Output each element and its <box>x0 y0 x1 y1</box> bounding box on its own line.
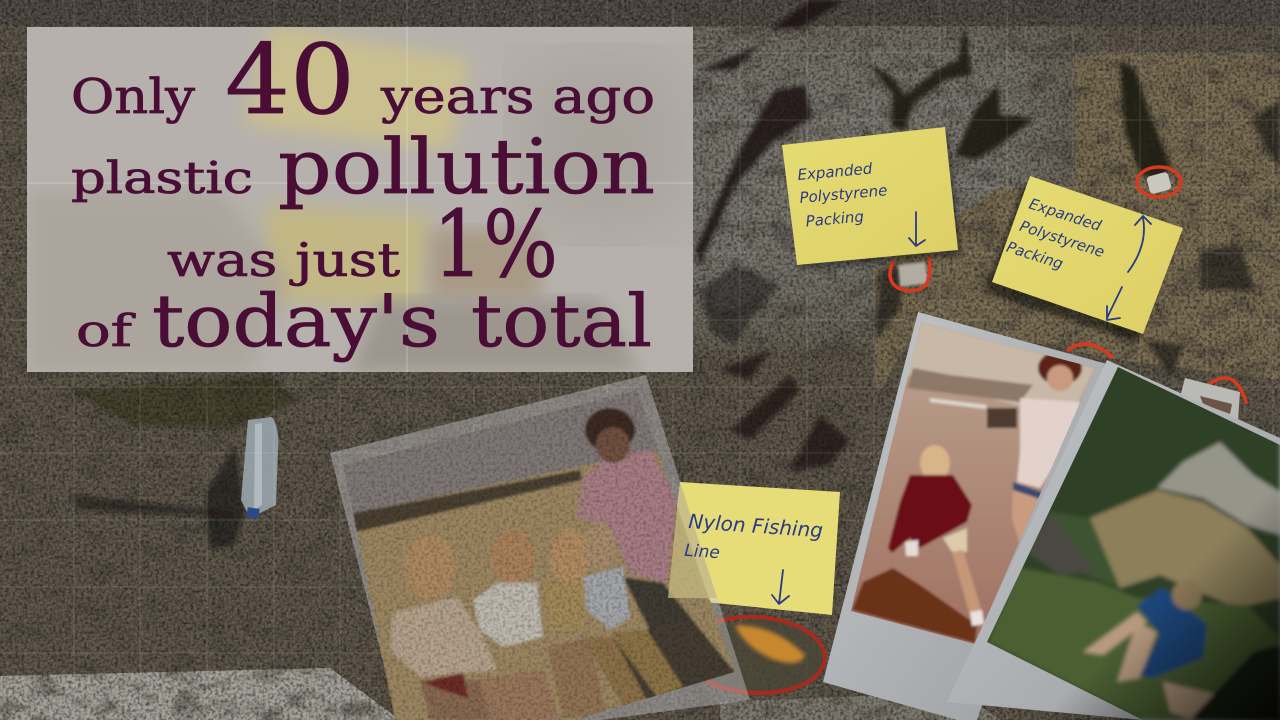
corner vignette <box>1040 480 1280 720</box>
title panel <box>27 24 693 372</box>
photo 1 picture <box>343 390 735 720</box>
sticky note 2 <box>984 176 1183 342</box>
note 3 label <box>684 509 824 604</box>
title line 1: 40 <box>225 24 355 136</box>
title line 3: 1% <box>433 191 558 298</box>
photo 2 frame <box>823 312 1107 720</box>
title line 4: of <box>76 306 136 357</box>
sticky note 1 <box>782 127 962 270</box>
note 3 arrow <box>772 570 789 604</box>
note 3 text: Line <box>684 541 720 563</box>
note 1 text: Expanded <box>797 159 873 184</box>
photo 2 picture <box>851 322 1095 644</box>
title line 3: was just <box>167 233 401 287</box>
nylon fishing line with red circle <box>683 613 827 697</box>
title line 4: total <box>471 279 652 363</box>
photo 3 picture <box>980 360 1280 720</box>
woman <box>577 450 677 583</box>
note 1 arrow <box>909 212 925 246</box>
sitting woman <box>1083 612 1147 655</box>
boy <box>920 445 950 481</box>
note 3 text: Nylon Fishing <box>688 509 824 542</box>
title line 1: Only <box>71 69 195 125</box>
red circle: polystyrene at top right <box>1137 167 1181 197</box>
sticky note 3 <box>666 482 840 615</box>
note 1 text: Packing <box>805 207 865 230</box>
title line 2: pollution <box>278 122 655 211</box>
child 3 <box>550 529 590 585</box>
title line 4: today's <box>152 279 440 363</box>
title line 2: plastic <box>71 153 253 204</box>
photo 1 frame <box>330 375 750 720</box>
note 2 text: Packing <box>1004 238 1065 273</box>
panel backdrop <box>27 25 693 372</box>
photo: family on the beach <box>330 375 750 720</box>
woman <box>1036 354 1084 382</box>
title line 1: years ago <box>380 69 655 125</box>
plastic bottle <box>241 417 278 519</box>
photo: boy digging in sand <box>823 310 1110 720</box>
child 2 <box>491 530 535 584</box>
note 1 text: Polystyrene <box>799 181 888 207</box>
note 2 text: Expanded <box>1027 195 1104 235</box>
photo: cliffs and sunbathers <box>947 360 1280 720</box>
seaweed shadows and debris on the sand <box>70 0 1280 550</box>
red arcs peeking behind photos <box>1068 344 1246 402</box>
photo 3 frame <box>947 360 1280 720</box>
child 1 <box>405 534 455 600</box>
note 2 text: Polystyrene <box>1017 217 1107 261</box>
red circle: polystyrene under note 1 <box>890 258 930 291</box>
note 2 arrows <box>1107 216 1151 320</box>
child 4 <box>584 522 616 572</box>
photo behind: peeking corner <box>1180 378 1240 420</box>
translucent overlay where photo 1 covers note 3 <box>668 482 717 598</box>
dark foreground figure <box>1190 645 1280 720</box>
